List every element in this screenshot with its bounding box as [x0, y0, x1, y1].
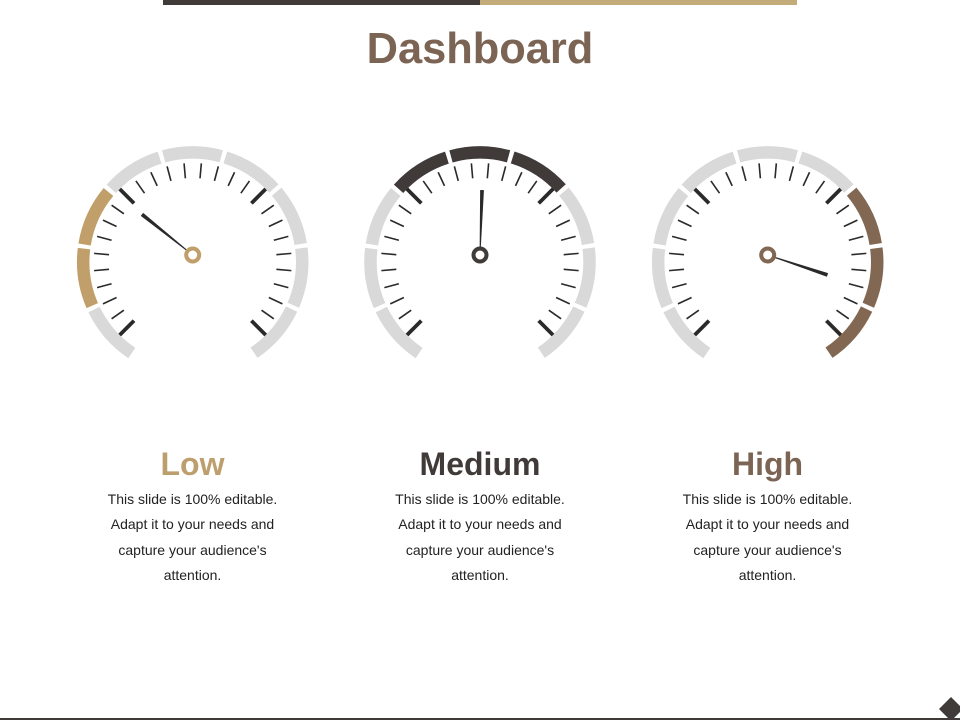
footer diamond and line — [0, 697, 960, 720]
text block: low: This slide is 100% editable. — [108, 491, 277, 507]
text block: low — [108, 446, 277, 583]
text block: medium: This slide is 100% editable. — [395, 491, 565, 507]
gauge: high — [613, 107, 922, 417]
text block: medium: attention. — [451, 567, 509, 583]
text block: medium: Adapt it to your needs and — [398, 516, 562, 532]
text block: high: capture your audience's — [693, 542, 842, 558]
text block: low: capture your audience's — [118, 542, 267, 558]
text block: low: Adapt it to your needs and — [111, 516, 274, 532]
text block: high: attention. — [739, 567, 796, 583]
text block: high: This slide is 100% editable. — [683, 491, 852, 507]
text block: high — [682, 446, 852, 583]
text block: high: High — [732, 446, 803, 482]
text block: low: attention. — [164, 567, 221, 583]
text block: medium: capture your audience's — [406, 542, 554, 558]
title: Dashboard — [367, 25, 593, 73]
text block: high: Adapt it to your needs and — [686, 516, 849, 532]
text block: low: Low — [160, 446, 224, 482]
text block: medium — [395, 446, 565, 583]
gauge: low — [38, 107, 347, 417]
top bar — [163, 0, 797, 5]
text block: medium: Medium — [420, 446, 540, 482]
gauge: medium — [325, 107, 635, 417]
